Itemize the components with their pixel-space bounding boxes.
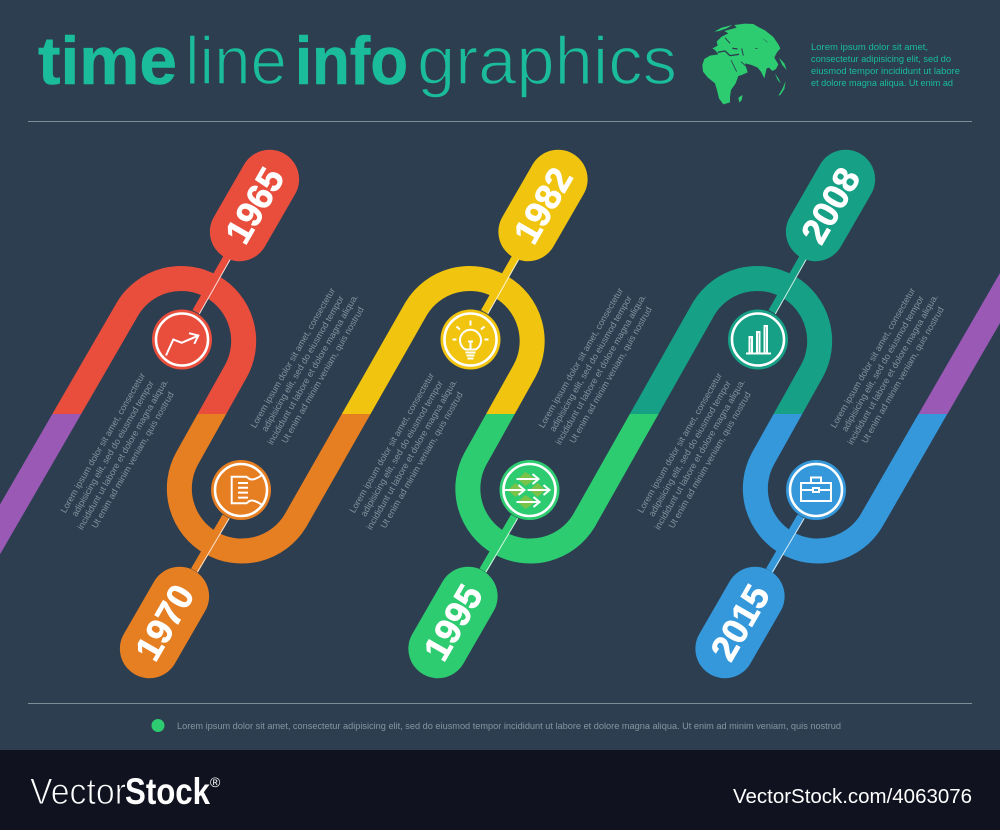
logo: ® — [210, 774, 221, 790]
milestone 2008: 2008 — [793, 161, 868, 250]
logo: Stock — [125, 771, 210, 812]
icon: green dot — [152, 719, 164, 732]
band: teal arch — [630, 266, 832, 414]
text block: header description: et dolore magna aliqua. Ut enim ad — [811, 77, 953, 88]
band: red arch — [52, 266, 256, 414]
milestone 1995 — [398, 460, 560, 689]
milestone 1982 — [440, 139, 598, 370]
text block 1: Ut enim ad minim veniam, quis nostrud — [89, 390, 176, 530]
text block 4 — [533, 281, 658, 452]
milestone 2015: 2015 — [702, 578, 778, 667]
logo — [30, 771, 221, 812]
text block 1: adipisicing elit, sed do eiusmod tempor — [70, 379, 156, 518]
text block 4: Ut enim ad minim veniam, quis nostrud — [567, 305, 654, 445]
text block 4: Lorem ipsum dolor sit amet, consectetur — [536, 286, 625, 430]
icon: bar chart — [746, 326, 771, 354]
text block: header description: consectetur adipisicing elit, sed do — [811, 53, 951, 64]
text block 5: incididunt ut labore et dolore magna aliqua. — [652, 377, 747, 531]
text block 6: Ut enim ad minim veniam, quis nostrud — [859, 305, 946, 445]
milestone 1965: 1965 — [217, 161, 292, 250]
milestone 1995: 1995 — [415, 578, 491, 667]
title: line — [185, 23, 287, 99]
text block 5: adipisicing elit, sed do eiusmod tempor — [647, 379, 733, 518]
text block 1: incididunt ut labore et dolore magna aliqua. — [75, 377, 170, 531]
title — [38, 23, 677, 99]
text block: header description: Lorem ipsum dolor sit amet, — [811, 41, 928, 52]
milestone 1970: 1970 — [127, 578, 202, 667]
text block 2: Lorem ipsum dolor sit amet, consectetur — [248, 286, 337, 430]
text block 2: adipisicing elit, sed do eiusmod tempor — [260, 294, 346, 433]
icon: briefcase — [801, 478, 831, 501]
text block 1: Lorem ipsum dolor sit amet, consectetur — [58, 371, 147, 515]
text block 5: Ut enim ad minim veniam, quis nostrud — [666, 390, 753, 530]
text block 2 — [245, 281, 370, 452]
text block 2: incididunt ut labore et dolore magna aliqua. — [265, 292, 360, 446]
text block 5: Lorem ipsum dolor sit amet, consectetur — [635, 371, 724, 515]
footnote: Lorem ipsum dolor sit amet, consectetur adipisicing elit, sed do eiusmod tempor incididunt ut labore et dolore magna aliqua. Ut enim ad minim veniam, quis nostrud — [177, 720, 841, 731]
band: orange curve — [166, 414, 370, 564]
header divider — [28, 121, 972, 122]
text block 4: adipisicing elit, sed do eiusmod tempor — [548, 294, 634, 433]
text block 3: Lorem ipsum dolor sit amet, consectetur — [347, 371, 436, 515]
title: info — [295, 23, 408, 99]
title: graphics — [417, 23, 677, 99]
milestone 2015 — [685, 460, 846, 689]
text block 5 — [632, 366, 757, 537]
icon: document — [232, 475, 262, 505]
icon: globe — [702, 24, 787, 104]
text block 2: Ut enim ad minim veniam, quis nostrud — [279, 305, 366, 445]
title: time — [38, 23, 177, 99]
text block 4: incididunt ut labore et dolore magna aliqua. — [553, 292, 648, 446]
text block 3: adipisicing elit, sed do eiusmod tempor — [359, 379, 445, 518]
milestone 1965 — [152, 139, 310, 370]
band: blue curve — [742, 414, 948, 564]
text block 3: Ut enim ad minim veniam, quis nostrud — [378, 390, 465, 530]
milestone 2008 — [728, 139, 886, 370]
text block 6 — [825, 281, 950, 452]
milestone 1982: 1982 — [505, 161, 581, 250]
text block 6: incididunt ut labore et dolore magna aliqua. — [845, 292, 940, 446]
text block 1 — [55, 366, 180, 537]
text block: header description: eiusmod tempor incididunt ut labore — [811, 65, 960, 76]
icon: light bulb — [452, 320, 488, 358]
icon: trend arrow — [166, 333, 198, 356]
logo: Vector — [30, 771, 126, 812]
milestone 1970 — [109, 460, 271, 689]
band: yellow arch — [342, 266, 545, 414]
band: purple start — [0, 414, 82, 554]
timeline band — [0, 266, 1000, 564]
watermark bar — [0, 750, 1000, 830]
footer divider — [28, 703, 972, 704]
text block 6: adipisicing elit, sed do eiusmod tempor — [840, 294, 926, 433]
band: purple end — [918, 273, 1000, 414]
band: green curve — [455, 414, 658, 564]
icon: arrows — [504, 472, 550, 509]
text block 6: Lorem ipsum dolor sit amet, consectetur — [828, 286, 917, 430]
text block: header description — [811, 41, 960, 88]
text block 3 — [344, 366, 469, 537]
text block 3: incididunt ut labore et dolore magna aliqua. — [364, 377, 459, 531]
image id: VectorStock.com/4063076 — [733, 786, 972, 808]
